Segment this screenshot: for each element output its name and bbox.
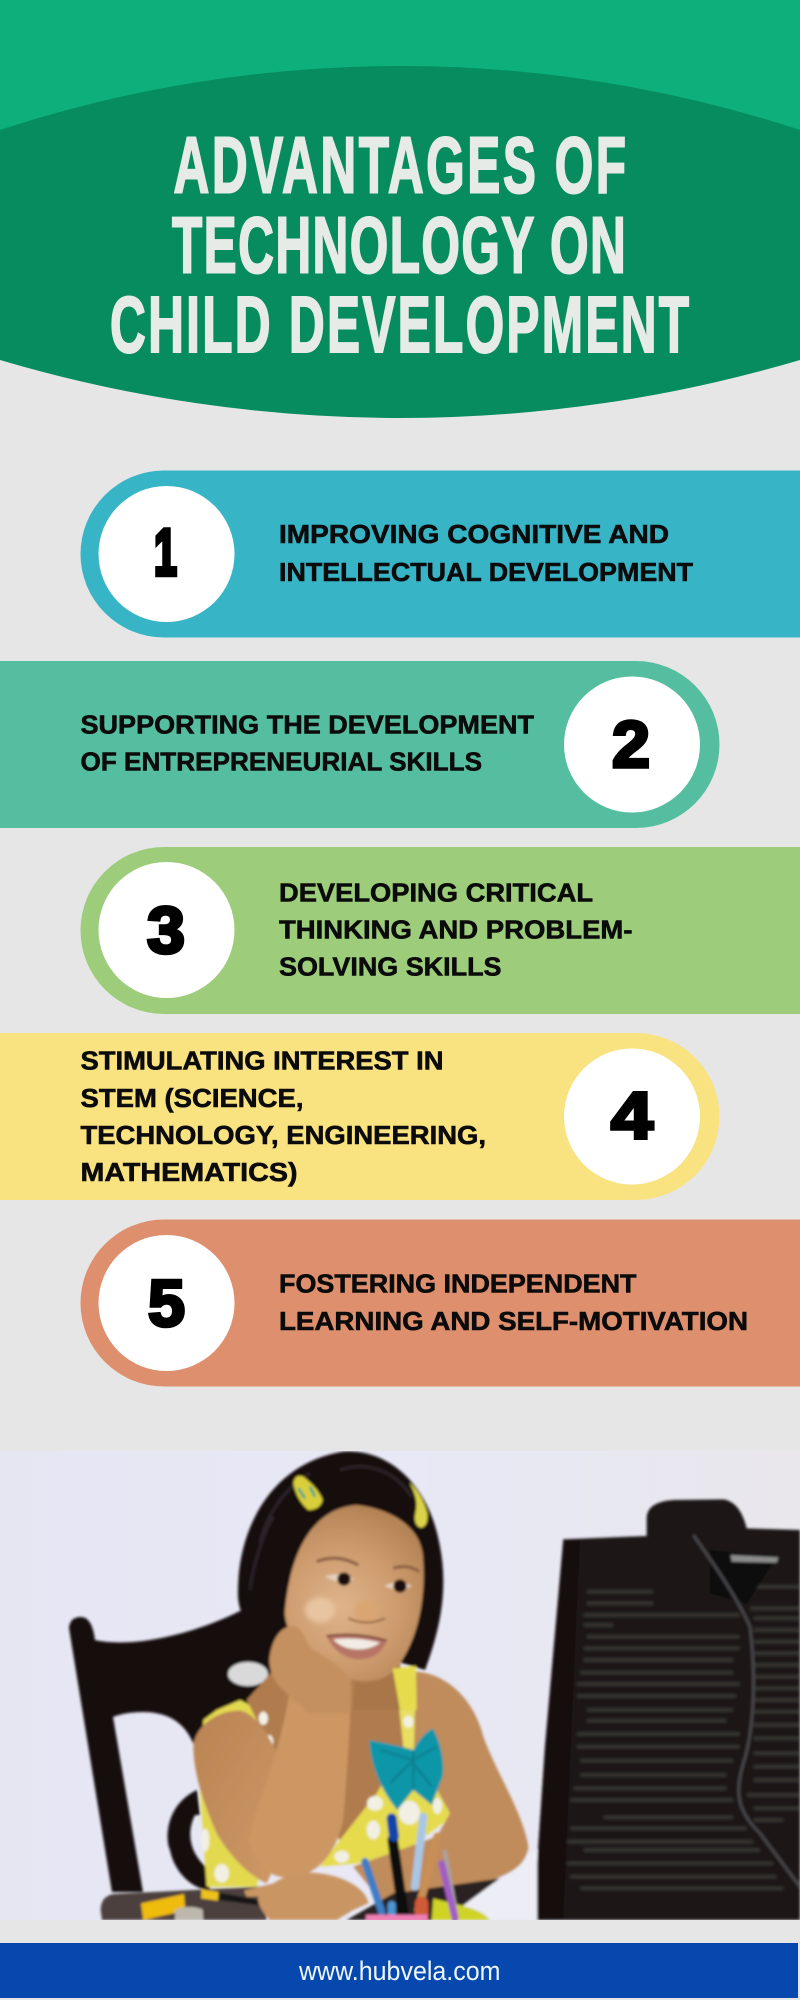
panel: item 3 — [81, 847, 800, 1014]
hair clips — [293, 1476, 323, 1510]
panel: item 2 — [0, 661, 720, 828]
pens in cup — [365, 1817, 457, 1918]
text: item 5 — [279, 1268, 748, 1336]
text: item 4 — [80, 1046, 486, 1187]
polka dots — [201, 1687, 442, 1883]
body — [101, 1670, 528, 1921]
monitor — [533, 1499, 800, 1920]
photo: child at a computer — [0, 1451, 800, 1921]
torso — [247, 1670, 403, 1840]
text: item 1: IMPROVING COGNITIVE AND — [279, 519, 669, 549]
text: item 4: TECHNOLOGY, ENGINEERING, — [80, 1120, 486, 1150]
text: item 4: STEM (SCIENCE, — [80, 1083, 304, 1113]
footer bar — [0, 1943, 798, 1998]
title: CHILD DEVELOPMENT — [110, 281, 689, 370]
number 2: 2 — [612, 707, 650, 781]
text: item 2: OF ENTREPRENEURIAL SKILLS — [80, 746, 482, 776]
pink cup — [366, 1915, 428, 1921]
yellow object — [432, 1898, 490, 1920]
right arm — [353, 1672, 528, 1900]
text: item 3: THINKING AND PROBLEM- — [279, 914, 632, 944]
text: item 2: SUPPORTING THE DEVELOPMENT — [80, 710, 534, 740]
forearm — [270, 1696, 351, 1880]
panel: item 5 — [81, 1220, 800, 1386]
sharpener — [141, 1894, 185, 1920]
marker on desk — [201, 1889, 260, 1905]
fist — [266, 1626, 345, 1694]
number 5: 5 — [148, 1266, 185, 1340]
text: item 3 — [279, 878, 632, 982]
text: item 4: STIMULATING INTEREST IN — [80, 1046, 444, 1076]
mouth — [327, 1635, 387, 1659]
text: item 5: LEARNING AND SELF-MOTIVATION — [279, 1306, 748, 1336]
text: item 3: SOLVING SKILLS — [279, 952, 502, 982]
text: item 4: MATHEMATICS) — [80, 1157, 298, 1187]
face — [285, 1505, 424, 1681]
title: TECHNOLOGY ON — [172, 202, 626, 291]
left upper arm — [191, 1709, 276, 1884]
desk — [101, 1887, 267, 1920]
panel: item 4 — [0, 1033, 720, 1200]
hand on desk — [244, 1873, 368, 1920]
text: item 1: INTELLECTUAL DEVELOPMENT — [279, 557, 693, 587]
back of hair — [238, 1451, 443, 1670]
table edge — [461, 1848, 540, 1920]
eraser — [175, 1907, 203, 1920]
chair — [69, 1611, 300, 1892]
title — [110, 122, 689, 370]
head — [238, 1451, 443, 1713]
blue bow — [369, 1728, 443, 1810]
dress back strap — [197, 1698, 260, 1889]
neck — [395, 1662, 402, 1710]
shoulder strap — [393, 1666, 417, 1710]
nostril shading — [348, 1618, 385, 1622]
title: ADVANTAGES OF — [174, 122, 626, 211]
text: item 3: DEVELOPING CRITICAL — [279, 878, 593, 908]
text: item 5: FOSTERING INDEPENDENT — [279, 1268, 637, 1298]
text: item 2 — [80, 710, 534, 776]
text: item 1 — [279, 519, 693, 587]
website url: www.hubvela.com — [298, 1956, 500, 1986]
number 1: 1 — [154, 515, 177, 589]
eyes and brows — [325, 1574, 354, 1582]
header panel — [0, 0, 800, 418]
number 3: 3 — [147, 893, 185, 967]
number 4: 4 — [611, 1078, 653, 1152]
panel: item 1 — [81, 470, 800, 638]
